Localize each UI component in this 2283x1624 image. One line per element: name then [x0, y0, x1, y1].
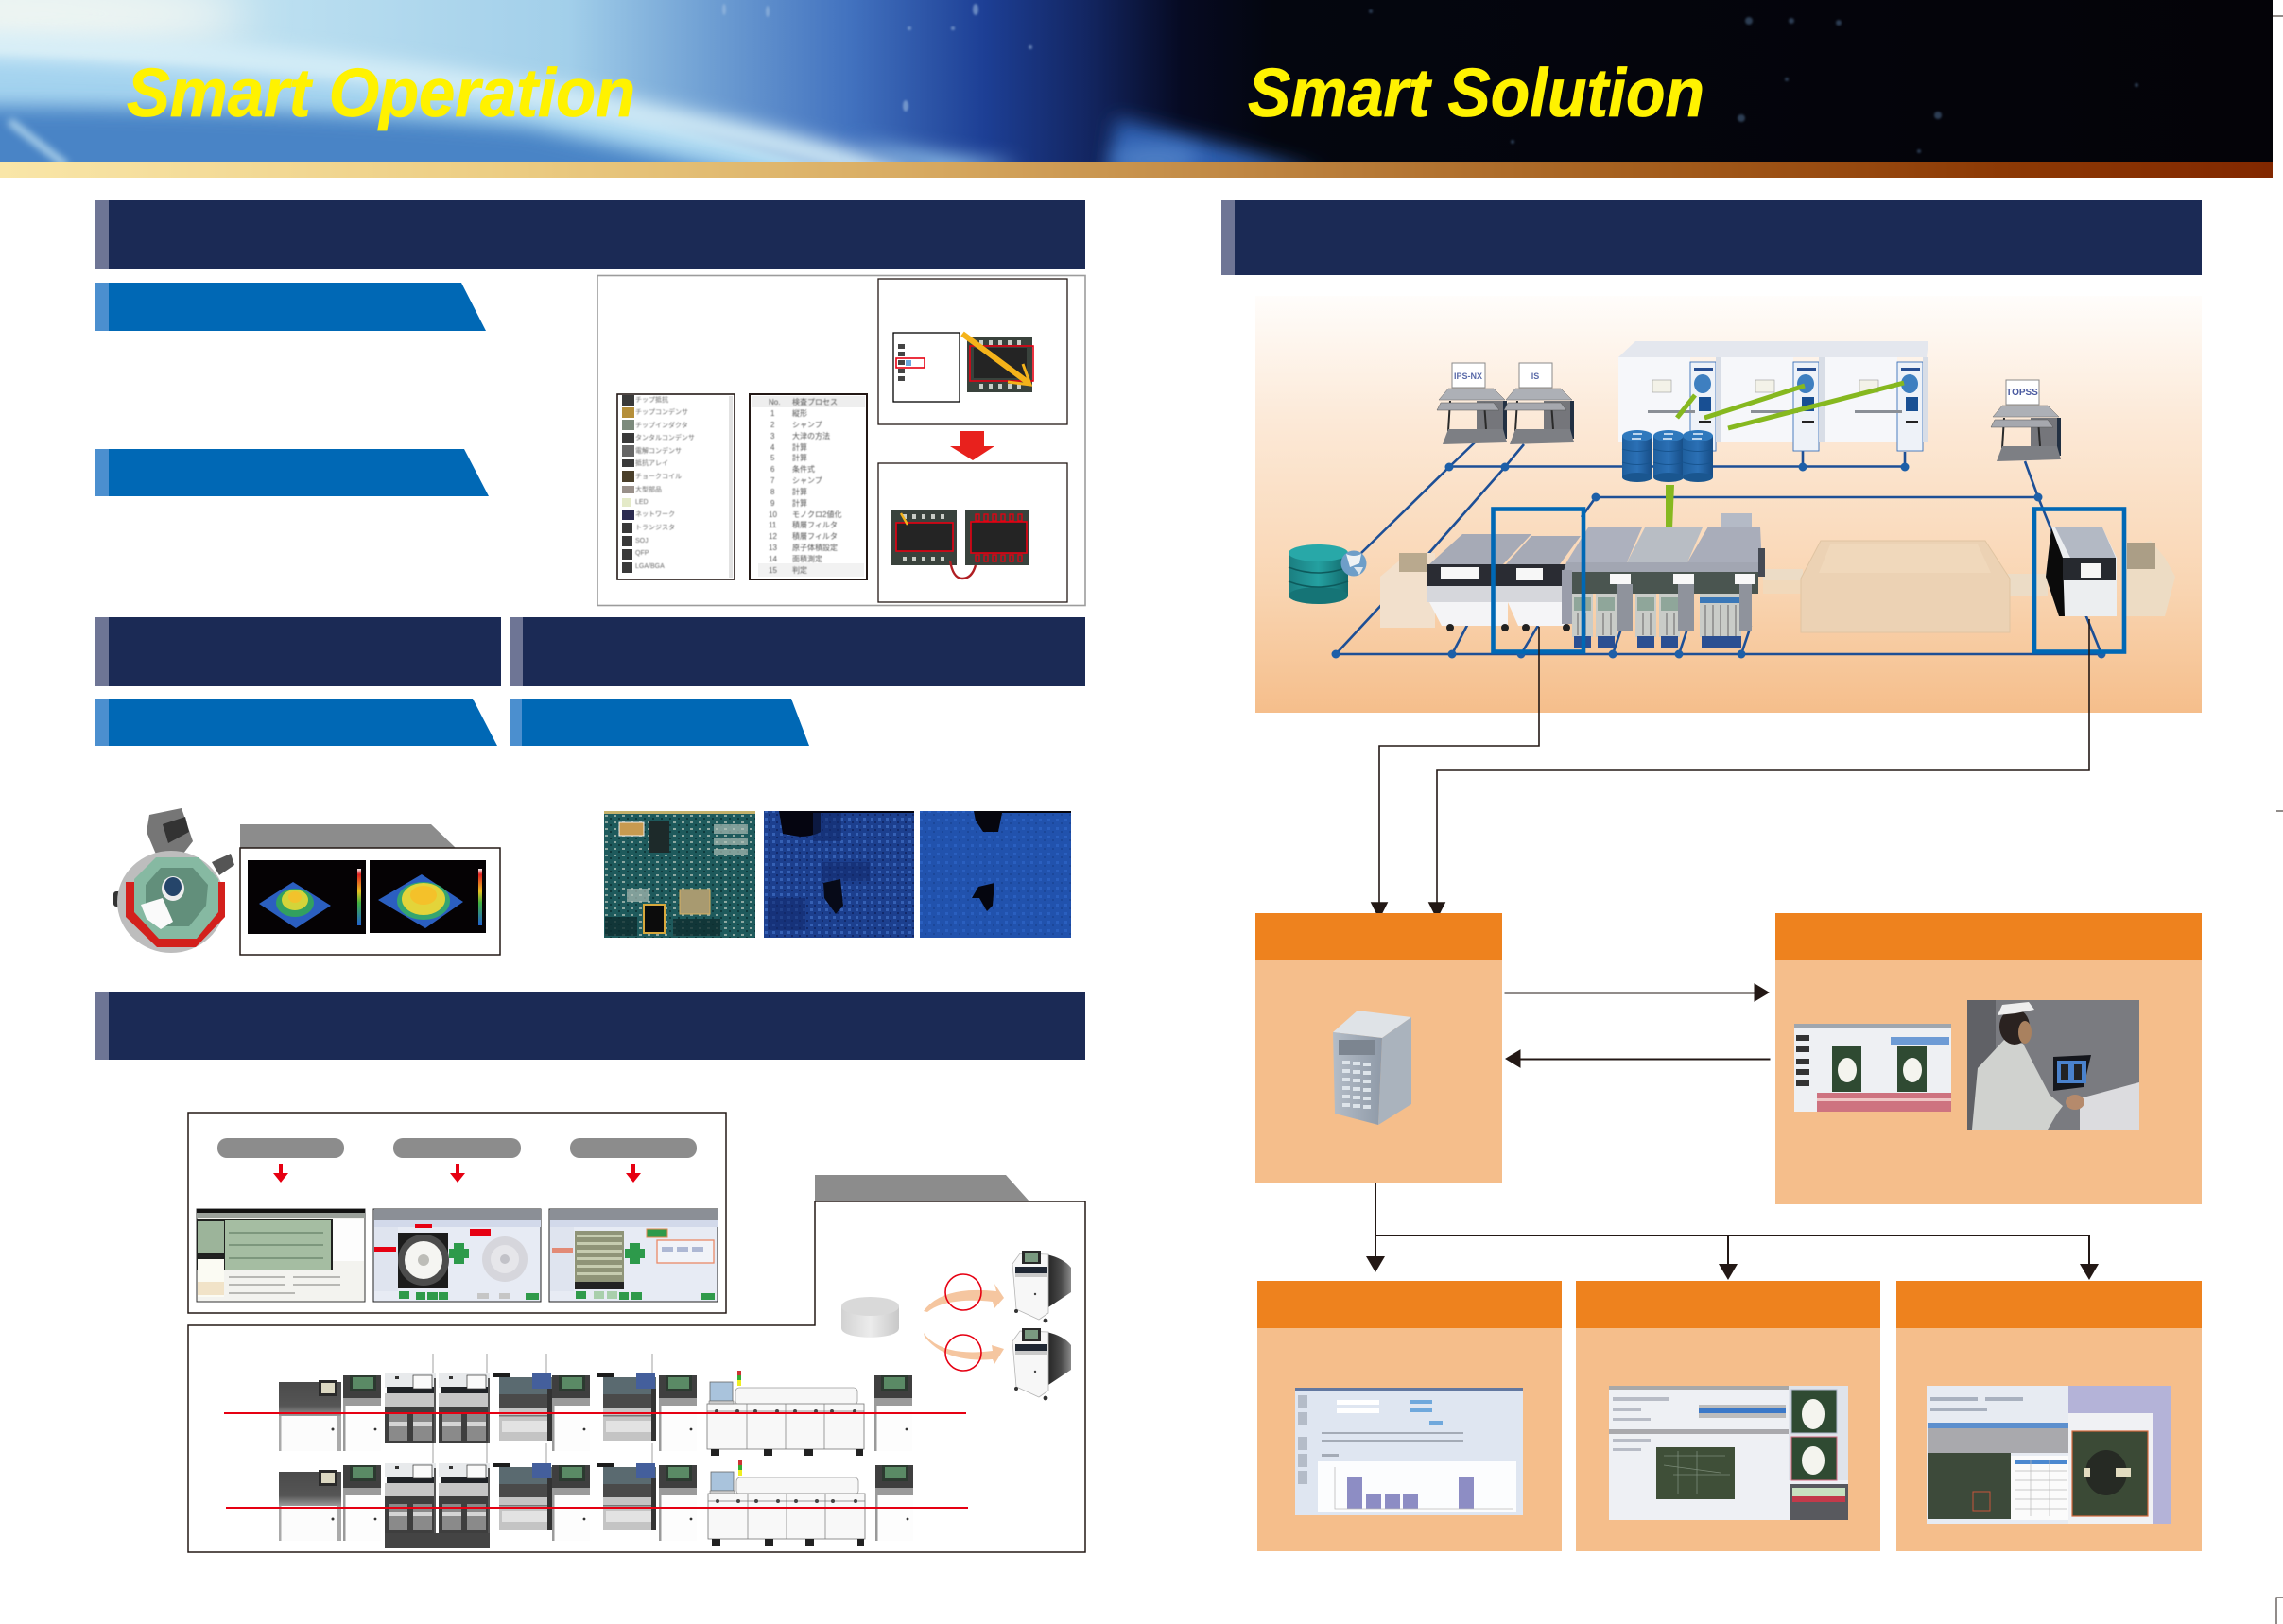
inspection process list: 計算	[792, 442, 807, 452]
inspection process list: 4	[770, 443, 775, 452]
board photo: blue capture	[764, 811, 914, 938]
circle mark upper	[945, 1274, 981, 1310]
inspection process list: 積層フィルタ	[792, 520, 838, 529]
crop marks	[2273, 16, 2283, 1624]
inspection process list: 計算	[792, 453, 807, 462]
inspection process list: シャンプ	[792, 476, 822, 485]
sub-heading tab 1	[95, 283, 486, 331]
title: Smart Operation: Smart Operation	[127, 56, 635, 131]
circle mark lower	[945, 1335, 981, 1371]
production line 2	[279, 1443, 913, 1548]
workstation: TOPSS	[1991, 380, 2061, 461]
screenshot 3: chip view	[549, 1209, 718, 1302]
arrow: down 1	[273, 1164, 288, 1183]
screenshot 1: board list	[197, 1209, 365, 1302]
production line 1	[279, 1354, 912, 1456]
inspection process list	[750, 394, 867, 579]
machine lower	[1012, 1328, 1071, 1400]
workstation: IPS-NX: IPS-NX	[1454, 371, 1482, 381]
tab: grey upper right	[815, 1175, 1029, 1201]
inspection process list: 11	[769, 521, 777, 529]
inspection process list: 5	[770, 454, 775, 462]
inspection process list: 3	[770, 432, 775, 441]
arrow: server to monitor	[1505, 984, 1769, 1001]
red line 1	[224, 1412, 966, 1414]
inspection process list: シャンプ	[792, 421, 822, 429]
arrow: monitor to server	[1506, 1050, 1770, 1067]
workstation: IS: IS	[1531, 371, 1539, 381]
inspection process list: 積層フィルタ	[792, 531, 838, 541]
inspection process list: 面積測定	[792, 554, 822, 563]
lower detail box	[878, 463, 1067, 602]
screenshot: image review	[1609, 1386, 1848, 1520]
connector: server down to three tools	[1366, 1183, 2099, 1280]
inspection process list: 2	[770, 421, 775, 429]
inspection process list: 12	[769, 532, 777, 541]
icon: data cylinder	[841, 1297, 899, 1338]
panel: statistics	[1257, 1281, 1562, 1551]
pill 3	[570, 1138, 697, 1158]
title: Smart Solution: Smart Solution	[1248, 56, 1704, 131]
component list: SOJ	[635, 538, 649, 544]
height map large	[370, 860, 486, 933]
sub-heading tab: middle right	[510, 699, 809, 746]
heading bar: middle left	[95, 617, 501, 686]
heading bar: upper right	[1221, 200, 2202, 275]
pill 1	[217, 1138, 344, 1158]
inspection process list: 計算	[792, 498, 807, 508]
workstation: IS	[1504, 363, 1574, 444]
component list: 電解コンデンサ	[635, 446, 682, 455]
panel: monitor station	[1775, 913, 2202, 1204]
component list: 抵抗アレイ	[635, 458, 668, 467]
highlight box left	[1494, 509, 1583, 652]
component list: 大型部品	[635, 485, 662, 493]
inspection process list: 1	[770, 409, 775, 418]
panel: image viewer	[1576, 1281, 1880, 1551]
component list: LGA/BGA	[635, 563, 665, 570]
inspection process list: 14	[769, 555, 777, 563]
workstation: TOPSS: TOPSS	[2006, 388, 2038, 398]
component list: チョークコイル	[635, 473, 682, 480]
arrow: green down	[1658, 485, 1679, 544]
component list: トランジスタ	[635, 523, 675, 531]
component list: ネットワーク	[635, 510, 675, 518]
component list: チップインダクタ	[635, 421, 688, 429]
network lines	[1331, 442, 2106, 658]
screenshot 2: nozzle view	[373, 1209, 541, 1302]
sub-heading tab 2	[95, 449, 489, 496]
inspection process list: 6	[770, 465, 775, 474]
icon: octagonal lighting head	[113, 808, 234, 953]
arrow: distribute lower	[924, 1333, 1004, 1364]
inspection process list: No.	[769, 398, 780, 406]
component list	[617, 394, 735, 579]
band: space and planet background	[0, 0, 2273, 162]
arrows: green feed lines	[1677, 383, 1904, 428]
panel: height maps	[240, 848, 500, 955]
arrow: distribute upper	[924, 1284, 1004, 1312]
arrow: red down	[950, 431, 994, 460]
workstation: IPS-NX	[1437, 363, 1507, 444]
photo: operator at laptop	[1967, 1000, 2139, 1130]
board photo: blue threshold	[920, 811, 1071, 938]
inspection process list: 7	[770, 476, 775, 485]
screenshot: verification	[1794, 1024, 1951, 1112]
component list: QFP	[635, 550, 649, 557]
inspection process list: 検査プロセス	[792, 397, 838, 406]
inspection process list: 9	[770, 499, 775, 508]
red line 2	[226, 1507, 968, 1509]
inspection process list: モノクロ2値化	[792, 510, 841, 519]
heading bar: lower left	[95, 992, 1085, 1060]
band: gold stripe	[0, 162, 2273, 178]
inspection process list: 判定	[792, 565, 807, 575]
pale machines: conveyor and oven	[1380, 541, 2175, 632]
icon: globe	[1340, 550, 1367, 577]
storage cabinets	[1618, 341, 1928, 451]
panel: production lines and program distribution	[188, 1201, 1085, 1552]
header band	[0, 0, 2273, 189]
inspection process list: 計算	[792, 487, 807, 496]
inspection process list: 15	[769, 566, 777, 575]
mounters	[1562, 513, 1765, 648]
screenshot: defect analysis	[1927, 1386, 2171, 1524]
icon: server tower	[1333, 1011, 1411, 1125]
component list: チップコンデンサ	[635, 407, 688, 416]
machine: printer	[1427, 534, 1531, 631]
board photo: colour	[604, 811, 755, 938]
inspection process list: 原子体積設定	[792, 543, 838, 552]
highlight box right	[2034, 509, 2124, 652]
component list: LED	[635, 499, 649, 506]
panel: server	[1255, 913, 1502, 1183]
heading bar: top left	[95, 200, 1085, 269]
panel: factory system diagram	[1255, 296, 2202, 713]
inspection process list: 13	[769, 544, 777, 552]
icon: database	[1289, 544, 1348, 604]
arrow: down 3	[626, 1164, 641, 1183]
inspection process list: 条件式	[792, 464, 815, 474]
inspection process list: 10	[769, 510, 777, 519]
component list: チップ抵抗	[635, 395, 668, 404]
inspection process list: 大津の方法	[792, 431, 830, 441]
arrow: down 2	[450, 1164, 465, 1183]
tab: grey	[240, 824, 456, 848]
panel: data analysis	[1896, 1281, 2202, 1551]
sub-heading tab: middle left	[95, 699, 497, 746]
screenshot: bar chart	[1295, 1388, 1523, 1515]
pill 2	[393, 1138, 521, 1158]
inspection process list: 8	[770, 488, 775, 496]
inspection process list: 縦形	[792, 408, 807, 418]
panel: program screens	[188, 1113, 726, 1313]
machine upper	[1012, 1251, 1071, 1322]
machine: inspection	[1506, 536, 1581, 631]
connector: right inspection to server	[1429, 619, 2089, 918]
upper detail box	[878, 279, 1067, 424]
panel: component library and inspection process	[597, 276, 1085, 605]
component list: タンタルコンデンサ	[635, 433, 695, 441]
icon: blue reels	[1622, 430, 1713, 482]
connector: left inspection to server	[1372, 627, 1539, 918]
machine: post-reflow inspection	[2046, 527, 2117, 616]
height map small	[248, 860, 366, 934]
heading bar: middle right	[510, 617, 1085, 686]
